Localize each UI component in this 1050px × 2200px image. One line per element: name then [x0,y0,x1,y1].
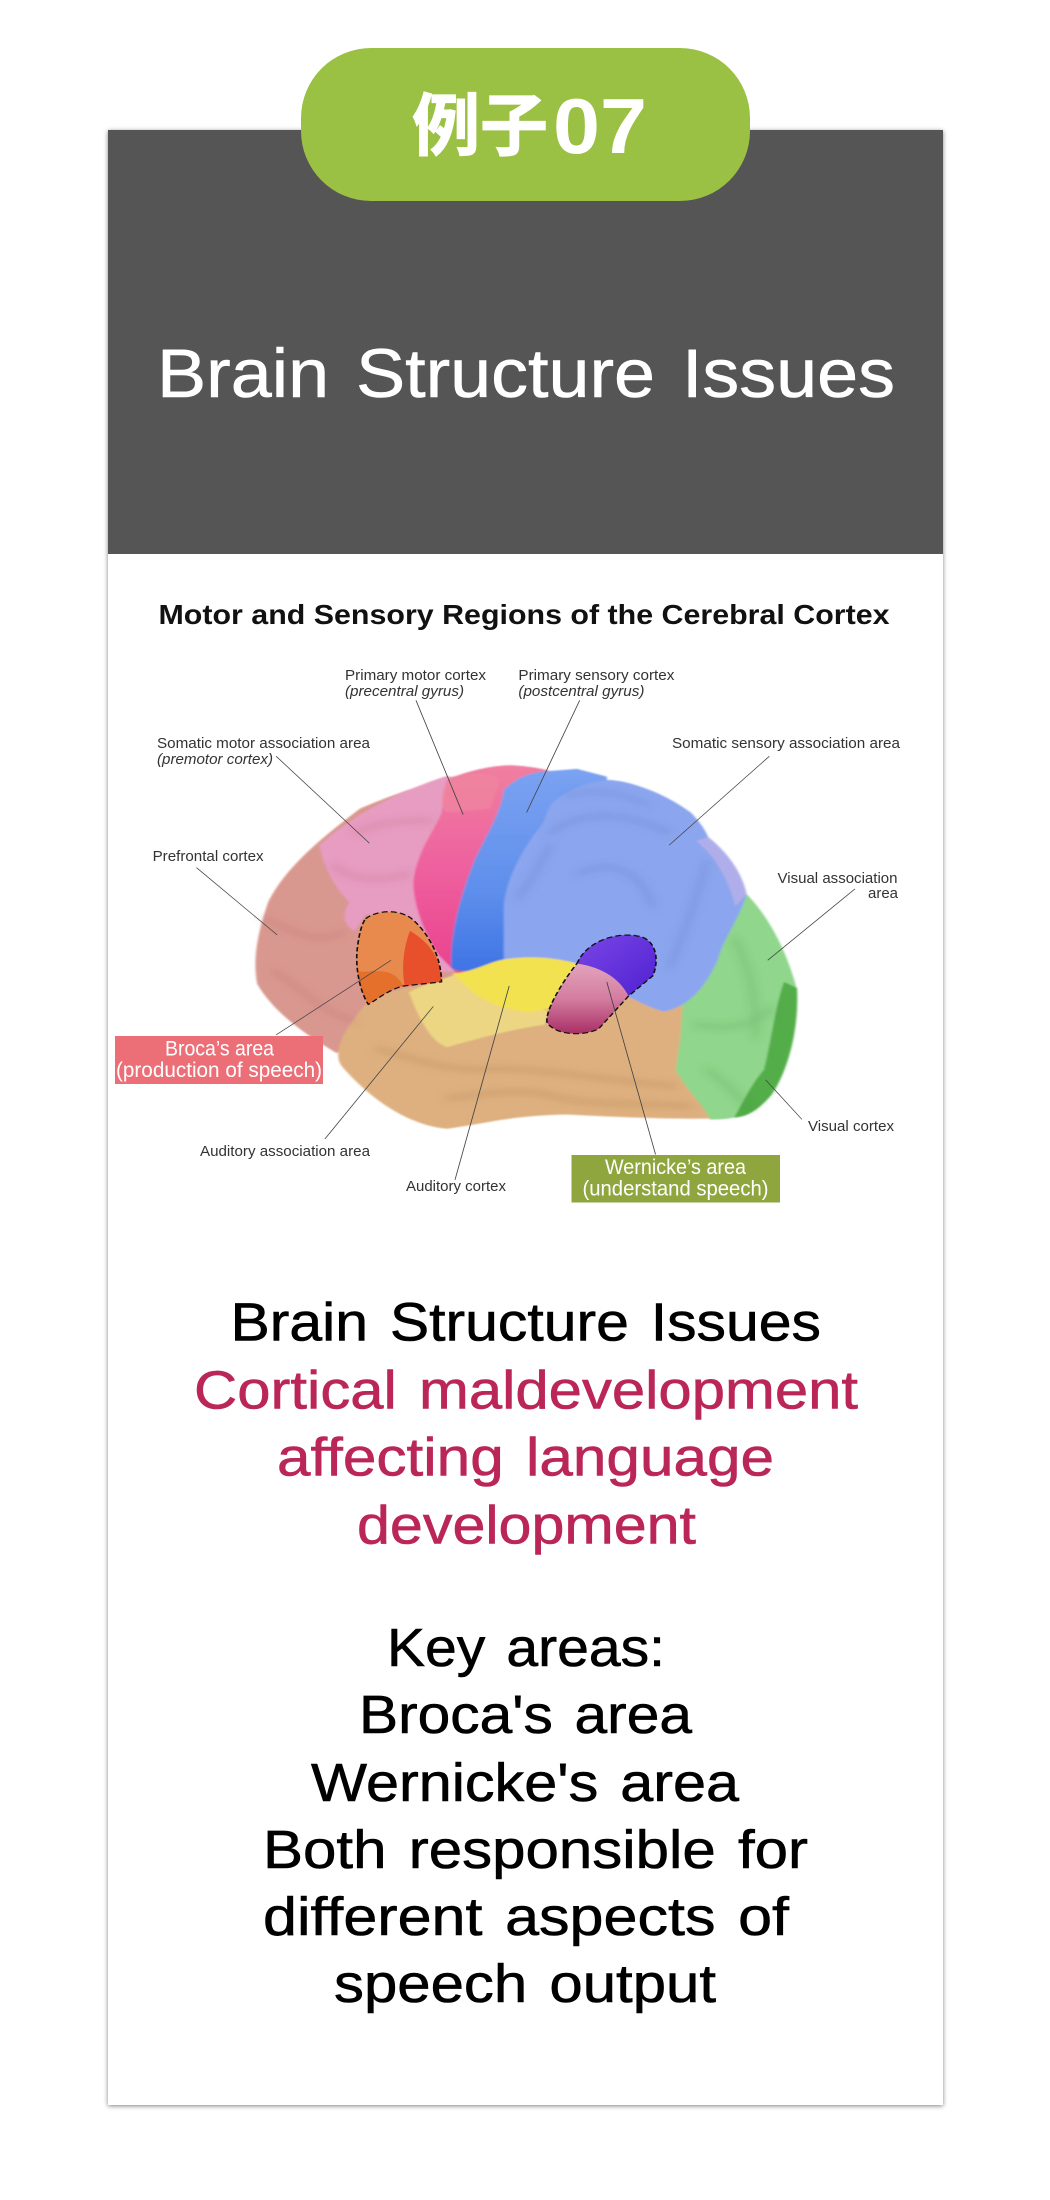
Broca's area highlight [357,912,441,1004]
text block: key areas: Both responsible for [263,1820,808,1880]
text block: definition: Brain Structure Issues [230,1293,821,1353]
label: auditory cortex: Auditory cortex [406,1179,507,1195]
callout: Broca's area [115,1036,323,1084]
label: primary motor cortex: Primary motor cortex [345,668,487,684]
text block: definition: affecting language [277,1428,774,1488]
label: somatic motor association area: Somatic motor association area [157,736,371,752]
label: visual association area: Visual association [778,871,898,887]
heading: Brain Structure Issues: Brain Structure Issues [157,335,895,412]
Wernicke's area highlight [547,935,656,1034]
label: visual cortex: Visual cortex [808,1119,895,1135]
label: visual association area [778,871,899,902]
brain illustration [196,700,855,1180]
label: primary sensory cortex [518,668,675,700]
diagram title: Motor and Sensory Regions of the Cerebral Cortex [158,599,890,630]
header band [108,130,943,554]
badge: example 07: 例子 [412,89,548,165]
text block: key areas: Broca's area [359,1685,693,1745]
label: auditory association area: Auditory association area [200,1144,371,1160]
badge: example 07: 07 [553,82,647,170]
callout: Broca's area: Broca’s area [165,1038,274,1060]
label: somatic sensory association area: Somatic sensory association area [672,736,901,752]
gyri folds [263,792,772,1110]
callout: Wernicke's area: Wernicke’s area [605,1156,746,1179]
text block: definition: Cortical maldevelopment [194,1360,858,1420]
leader lines [196,700,855,1180]
callout: Wernicke's area: (understand speech) [582,1178,768,1200]
label: prefrontal cortex: Prefrontal cortex [153,849,264,865]
panel: card [108,130,943,2105]
text block: key areas: speech output [334,1954,716,2014]
callout: Broca's area: (production of speech) [116,1059,322,1082]
callout: Wernicke's area [572,1155,780,1202]
text block: key areas: Key areas: [387,1618,665,1678]
label: somatic motor association area [157,736,371,768]
label: primary motor cortex: (precentral gyrus) [345,684,464,700]
label: somatic motor association area: (premotor cortex) [157,752,273,768]
diagram: cerebral cortex regions [115,599,901,1202]
text block: key areas: Wernicke's area [311,1753,740,1813]
text block: key areas [263,1618,808,2014]
label: visual association area: area [868,886,899,902]
text block: definition [194,1293,858,1555]
label: primary sensory cortex: (postcentral gyrus) [518,684,644,700]
text block: definition: development [357,1495,696,1555]
text block: key areas: different aspects of [263,1887,790,1947]
label: primary sensory cortex: Primary sensory cortex [518,668,675,684]
badge: example 07 [301,48,750,201]
label: primary motor cortex [345,668,487,700]
